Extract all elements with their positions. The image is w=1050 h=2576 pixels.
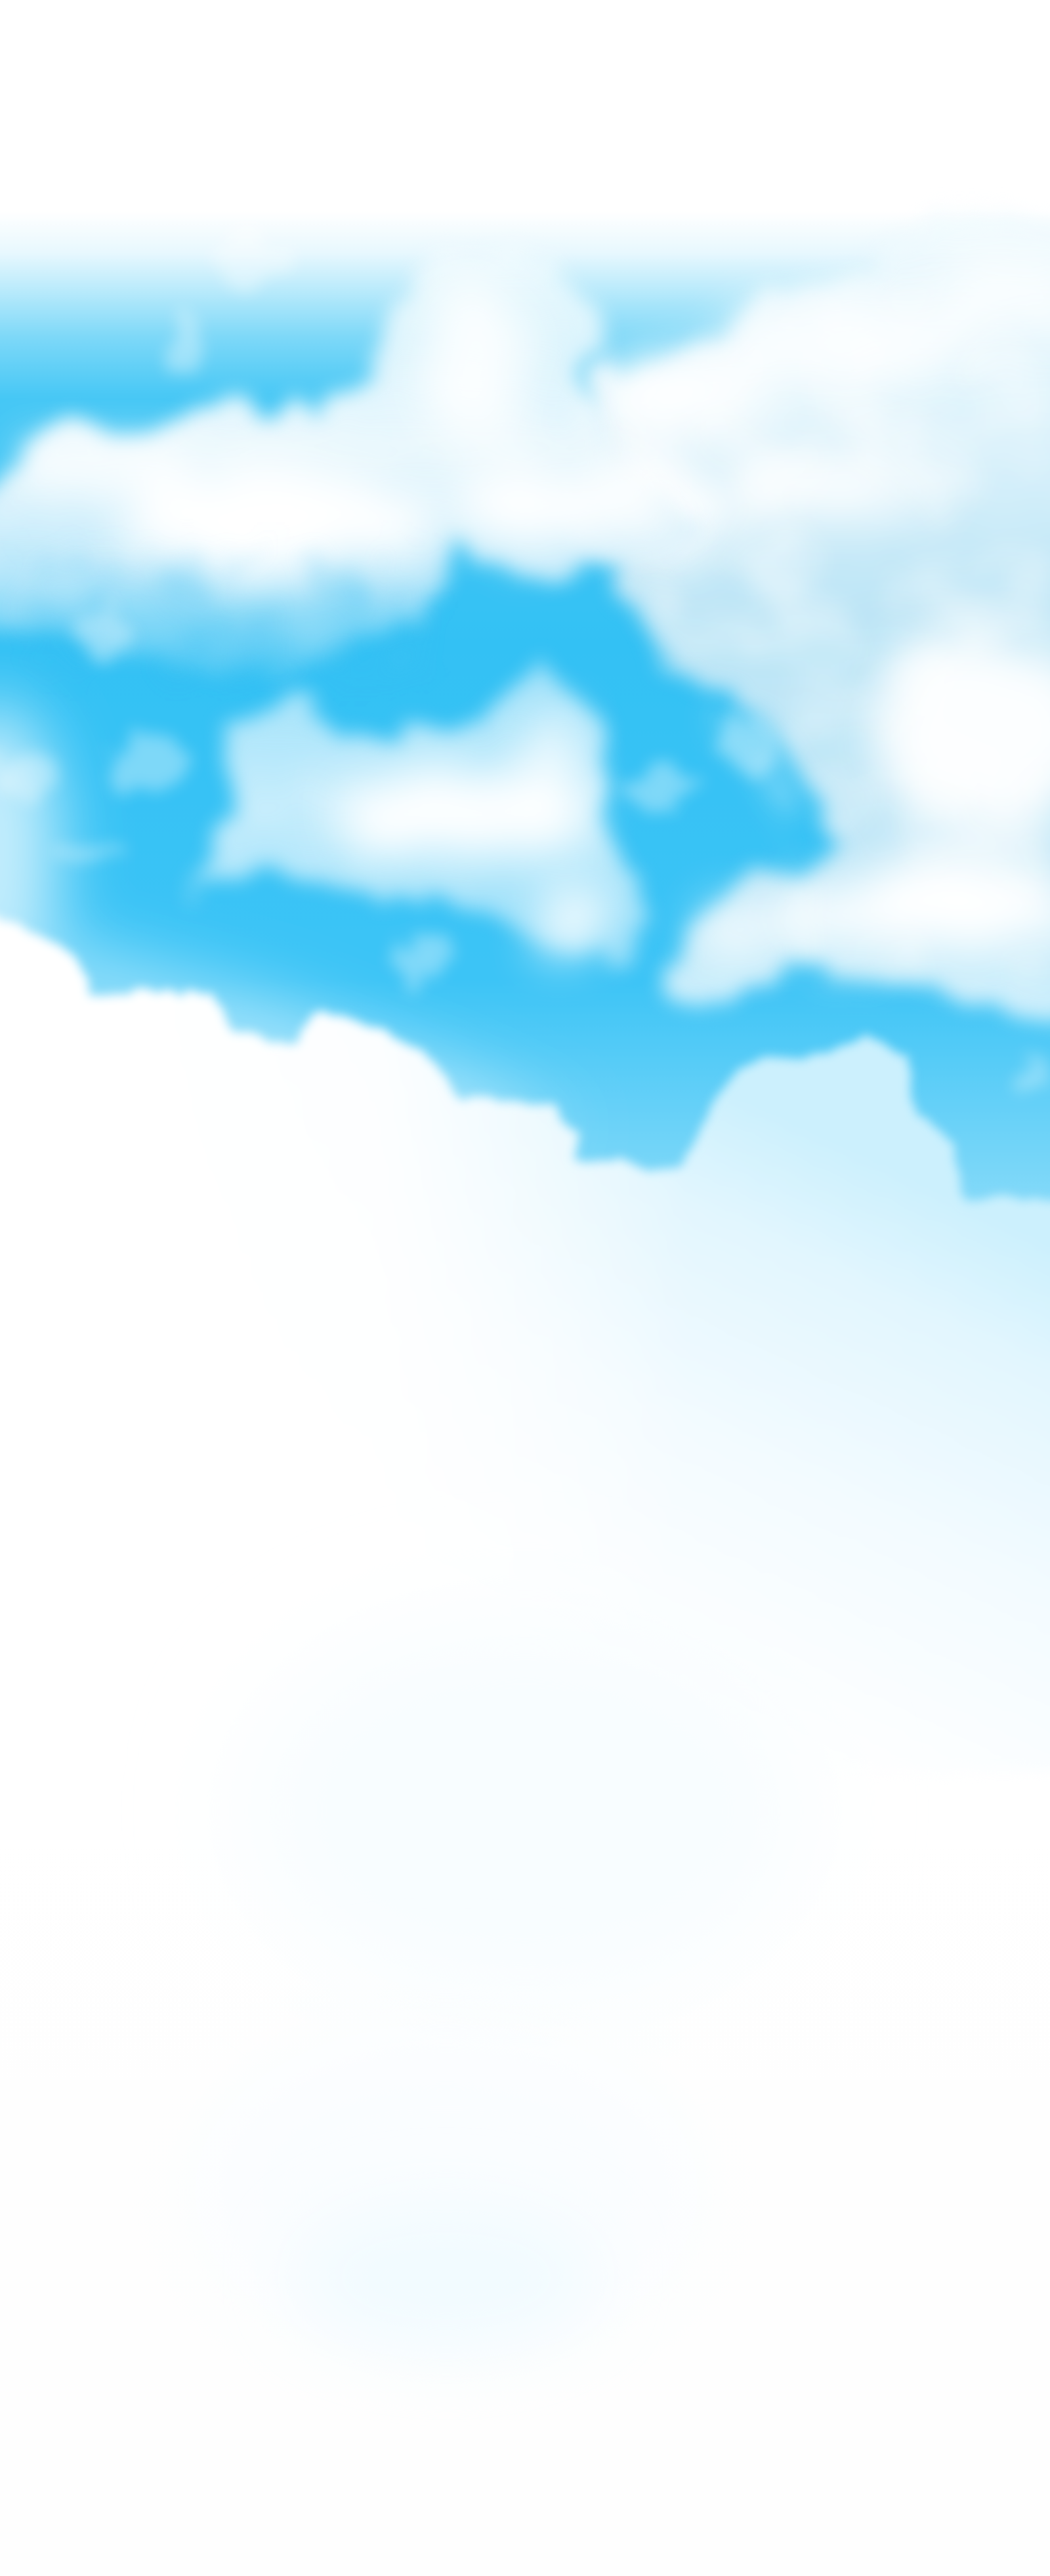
cloud: centre top and left — [0, 247, 706, 682]
faint haze: lower core — [295, 2205, 597, 2349]
faint haze: lower halo — [184, 2021, 709, 2362]
cloud mass: right — [564, 210, 1050, 1015]
faint haze: upper — [243, 1614, 807, 2008]
lower cloud bank — [0, 905, 1050, 1772]
sky haze near lower bank — [0, 702, 578, 1155]
cloud: lower middle — [189, 657, 649, 961]
cloud wisps — [0, 229, 1050, 1091]
